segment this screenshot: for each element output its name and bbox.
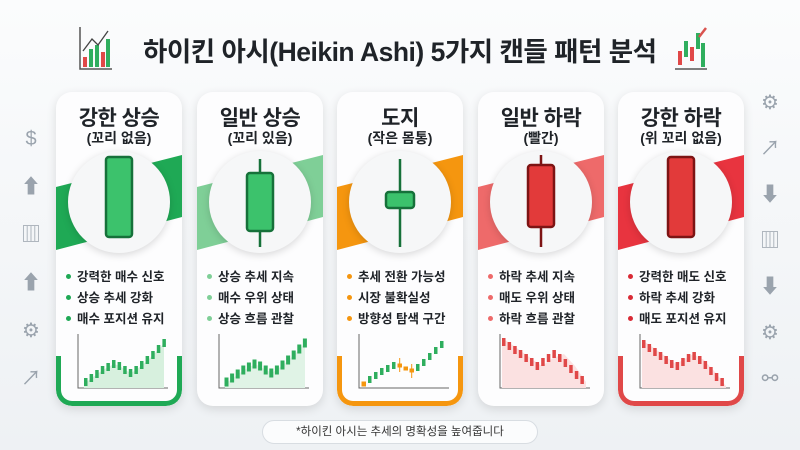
bullets xyxy=(347,270,446,326)
left side icons: ↗ xyxy=(21,368,41,390)
right side icons: ⚙ xyxy=(761,92,779,114)
left side icons: ▥ xyxy=(21,224,41,246)
left side icons: ⬆ xyxy=(21,176,41,198)
bullets: 매수 우위 상태 xyxy=(218,291,294,305)
bullets xyxy=(488,270,575,326)
bullets: 매도 포지션 유지 xyxy=(639,312,726,326)
icon: chart left xyxy=(79,27,112,70)
bullets: 방향성 탐색 구간 xyxy=(358,312,445,326)
bullets: 시장 불확실성 xyxy=(358,291,430,305)
bullets: 강력한 매도 신호 xyxy=(639,270,726,284)
panel: doji xyxy=(337,92,463,406)
left side icons: ⚙ xyxy=(22,320,40,342)
footnote: *하이킨 아시는 추세의 명확성을 높여줍니다 xyxy=(296,426,504,438)
right side icons: ⬇ xyxy=(760,184,780,206)
title: 하이킨 아시(Heikin Ashi) 5가지 캔들 패턴 분석 xyxy=(143,37,656,67)
icon: chart right xyxy=(675,27,707,70)
bullets xyxy=(207,270,294,326)
icon: candle xyxy=(349,151,451,253)
chart xyxy=(358,334,449,388)
bullets: 하락 추세 강화 xyxy=(639,291,715,305)
panel: normal up: (꼬리 있음) xyxy=(228,130,292,146)
bullets xyxy=(628,270,726,326)
bullets: 하락 추세 지속 xyxy=(499,270,575,284)
right side icons: ▥ xyxy=(760,230,780,252)
right side icons: ⚙ xyxy=(761,322,779,344)
left side icons: ⬆ xyxy=(21,272,41,294)
icon: candle xyxy=(630,151,732,253)
title xyxy=(79,27,707,70)
bullets: 강력한 매수 신호 xyxy=(77,270,164,284)
footnote xyxy=(262,420,538,444)
bullets xyxy=(66,270,164,326)
panel: strong up: (꼬리 없음) xyxy=(87,130,151,146)
bullets: 하락 흐름 관찰 xyxy=(499,312,575,326)
bullets: 매수 포지션 유지 xyxy=(77,312,164,326)
bullets: 상승 흐름 관찰 xyxy=(218,312,294,326)
panel: strong up xyxy=(56,92,182,406)
heading: 강한 상승 xyxy=(79,107,159,130)
panel: strong down: (위 꼬리 없음) xyxy=(640,130,722,146)
chart xyxy=(218,334,309,388)
panel: doji: (작은 몸통) xyxy=(368,130,432,146)
right side icons: ⬇ xyxy=(760,276,780,298)
panel: normal down: (빨간) xyxy=(523,130,559,146)
panel: normal up xyxy=(197,92,323,406)
bullets: 추세 전환 가능성 xyxy=(358,270,445,284)
heading: 일반 상승 xyxy=(220,107,300,130)
bullets: 상승 추세 강화 xyxy=(77,291,153,305)
chart xyxy=(78,334,168,388)
left side icons: $ xyxy=(25,128,37,150)
right side icons: ⚯ xyxy=(762,368,778,390)
panel: strong down xyxy=(618,92,744,406)
right side icons: ↗ xyxy=(760,138,780,160)
chart xyxy=(640,334,730,388)
left side icons xyxy=(21,128,41,390)
chart xyxy=(500,334,590,388)
bullets: 매도 우위 상태 xyxy=(499,291,575,305)
bullets: 상승 추세 지속 xyxy=(218,270,294,284)
panel: normal down xyxy=(478,92,604,406)
right side icons xyxy=(760,92,780,390)
heading: 강한 하락 xyxy=(641,107,721,130)
icon: candle xyxy=(490,151,592,253)
heading: 도지 xyxy=(381,107,419,130)
heading: 일반 하락 xyxy=(501,107,581,130)
icon: candle xyxy=(68,151,170,253)
icon: candle xyxy=(209,151,311,253)
